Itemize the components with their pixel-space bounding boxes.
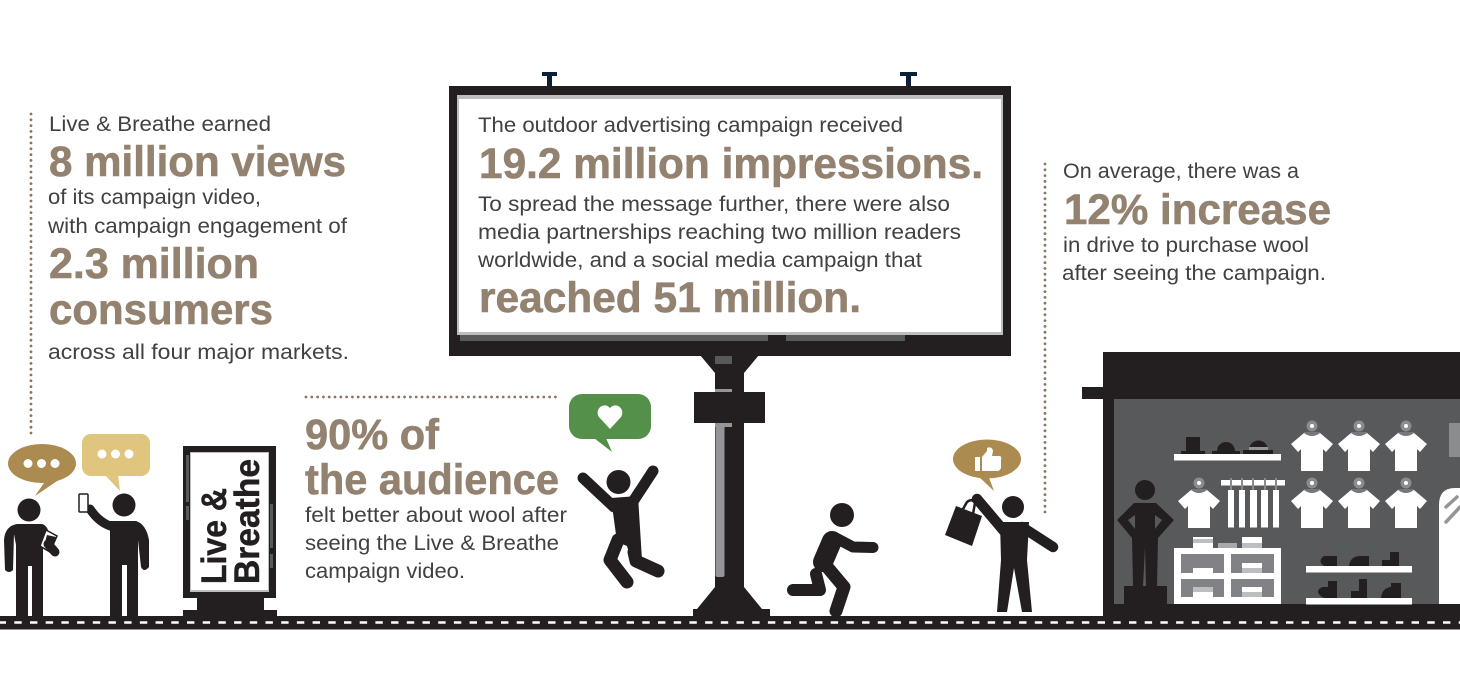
text block: video views	[31, 113, 349, 436]
icon: person with shopping bag	[945, 496, 1053, 612]
text block: drive to purchase: 12% increase	[1064, 186, 1331, 234]
billboard post	[693, 355, 770, 616]
icon: person taking a photo with phone	[79, 494, 149, 616]
text block: audience	[305, 397, 567, 583]
billboard text: media partnerships reaching two million readers	[478, 221, 961, 244]
billboard text: The outdoor advertising campaign received	[478, 114, 903, 137]
hanging t-shirts	[1178, 420, 1427, 528]
billboard text: worldwide, and a social media campaign that	[477, 249, 922, 272]
kiosk sign: Live & Breathe: Live &	[195, 488, 234, 584]
text block: drive to purchase: On average, there was a	[1063, 160, 1299, 183]
shoe shelves	[1306, 552, 1412, 604]
text block: audience: the audience	[305, 456, 559, 504]
text block: video views: across all four major markets.	[48, 341, 349, 364]
text block: video views: of its campaign video,	[48, 186, 261, 209]
text block: drive to purchase	[1045, 160, 1331, 516]
billboard text: 19.2 million impressions.	[479, 140, 983, 188]
billboard	[449, 72, 1011, 616]
speech bubble: thumbs up	[953, 440, 1021, 491]
kiosk sign: Live & Breathe: Breathe	[228, 459, 267, 584]
text block: video views: consumers	[49, 286, 273, 334]
speech bubble: green heart	[569, 394, 651, 452]
wall mirror	[1439, 423, 1460, 604]
text block: drive to purchase: in drive to purchase wool	[1063, 234, 1309, 257]
icon: person with phone at side	[4, 498, 57, 616]
speech bubble: gold dots	[82, 434, 150, 491]
billboard frame	[449, 86, 1011, 356]
text block: audience: seeing the Live & Breathe	[305, 532, 559, 555]
trouser rack	[1221, 478, 1285, 528]
text block: audience: felt better about wool after	[305, 504, 567, 527]
kiosk sign: Live & Breathe	[183, 446, 277, 617]
mannequin on pedestal	[1117, 480, 1174, 604]
text block: audience: 90% of	[305, 411, 440, 459]
billboard hooks	[542, 72, 917, 86]
text block: video views: with campaign engagement of	[47, 215, 347, 238]
store building	[1082, 352, 1460, 616]
clothing store	[1082, 352, 1460, 616]
text block: audience: campaign video.	[305, 560, 465, 583]
display cabinet	[1174, 537, 1281, 604]
text block: video views: Live & Breathe earned	[49, 113, 271, 136]
icon: jumping person	[583, 470, 658, 582]
text block: video views: 2.3 million	[49, 240, 259, 288]
billboard text: To spread the message further, there were also	[478, 193, 950, 216]
billboard text: reached 51 million.	[479, 274, 861, 322]
icon: running person	[793, 503, 873, 611]
billboard text	[477, 114, 983, 322]
speech bubble: brown dots	[8, 444, 76, 496]
text block: drive to purchase: after seeing the campaign.	[1062, 262, 1326, 285]
hat shelf	[1174, 437, 1281, 460]
road	[0, 616, 1460, 630]
text block: video views: 8 million views	[49, 138, 346, 186]
